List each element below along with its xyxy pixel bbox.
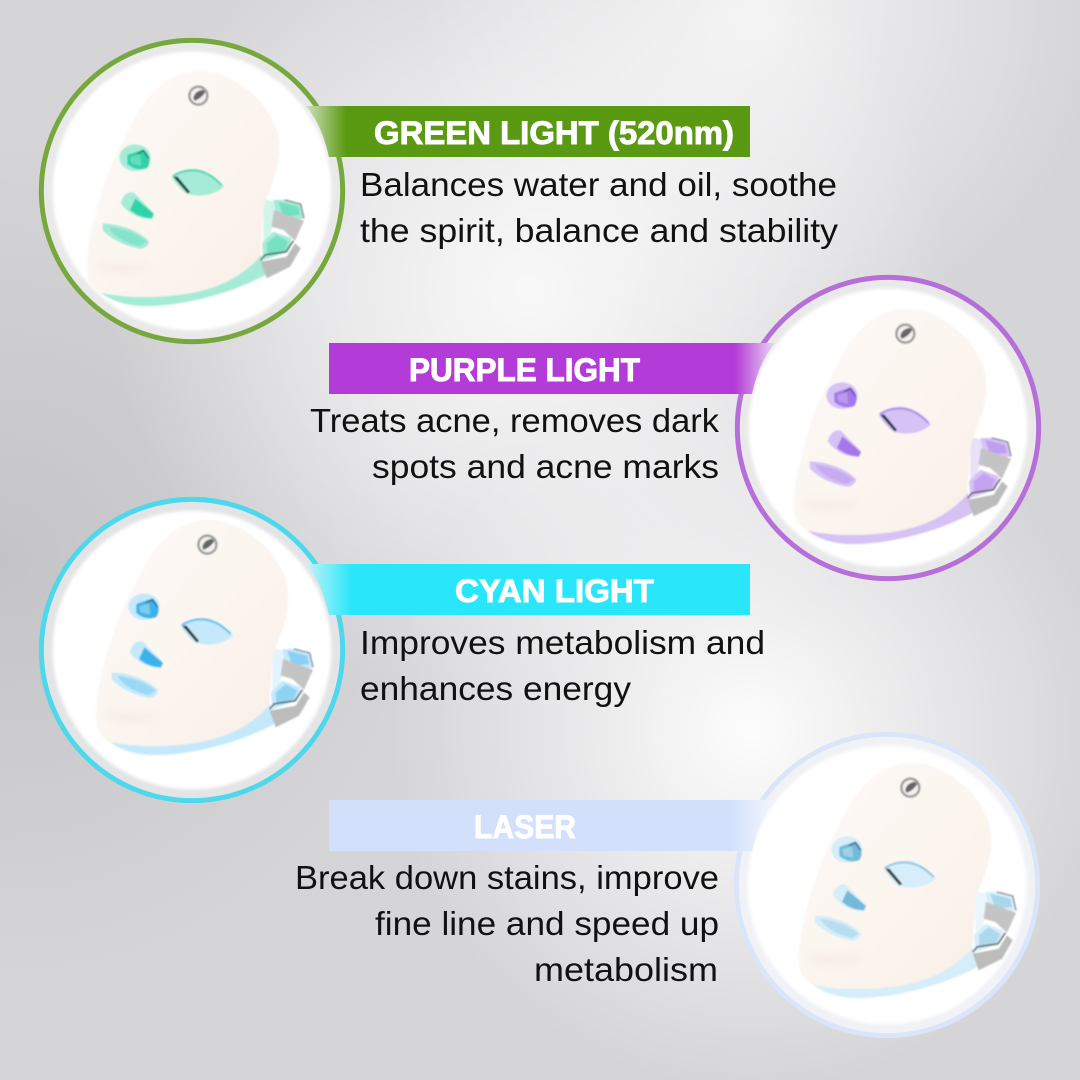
- laser description: [295, 859, 719, 988]
- panel: green light text: [306, 106, 839, 249]
- laser description: metabolism: [534, 951, 718, 988]
- laser description: fine line and speed up: [375, 905, 719, 942]
- cyan description: enhances energy: [360, 670, 632, 707]
- panel: cyan light circle: [41, 499, 343, 801]
- green description: Balances water and oil, soothe: [360, 166, 837, 203]
- panel: purple light text: [310, 343, 775, 485]
- panel: green light circle: [41, 40, 343, 342]
- cyan description: Improves metabolism and: [360, 624, 765, 661]
- green heading banner: [306, 106, 750, 157]
- icon: laser LED mask: [799, 763, 1016, 998]
- purple description: spots and acne marks: [372, 448, 719, 485]
- purple heading banner: [329, 343, 775, 394]
- cyan heading: CYAN LIGHT: [455, 573, 654, 609]
- icon: cyan LED mask: [96, 520, 313, 755]
- laser description: Break down stains, improve: [295, 859, 719, 896]
- cyan heading banner: [306, 564, 750, 615]
- green heading: GREEN LIGHT (520nm): [374, 115, 734, 151]
- icon: purple LED mask: [794, 309, 1011, 544]
- panel: laser text: [295, 800, 775, 988]
- green description: the spirit, balance and stability: [360, 212, 839, 249]
- green description: [360, 166, 839, 249]
- laser heading banner: [329, 800, 775, 851]
- laser heading: LASER: [474, 809, 576, 845]
- panel: laser circle: [736, 734, 1038, 1036]
- panel: purple light circle: [737, 277, 1039, 579]
- purple description: Treats acne, removes dark: [310, 402, 720, 439]
- cyan description: [360, 624, 765, 707]
- icon: green LED mask: [87, 71, 304, 306]
- purple heading: PURPLE LIGHT: [409, 352, 640, 388]
- purple description: [310, 402, 720, 485]
- panel: cyan light text: [306, 564, 765, 707]
